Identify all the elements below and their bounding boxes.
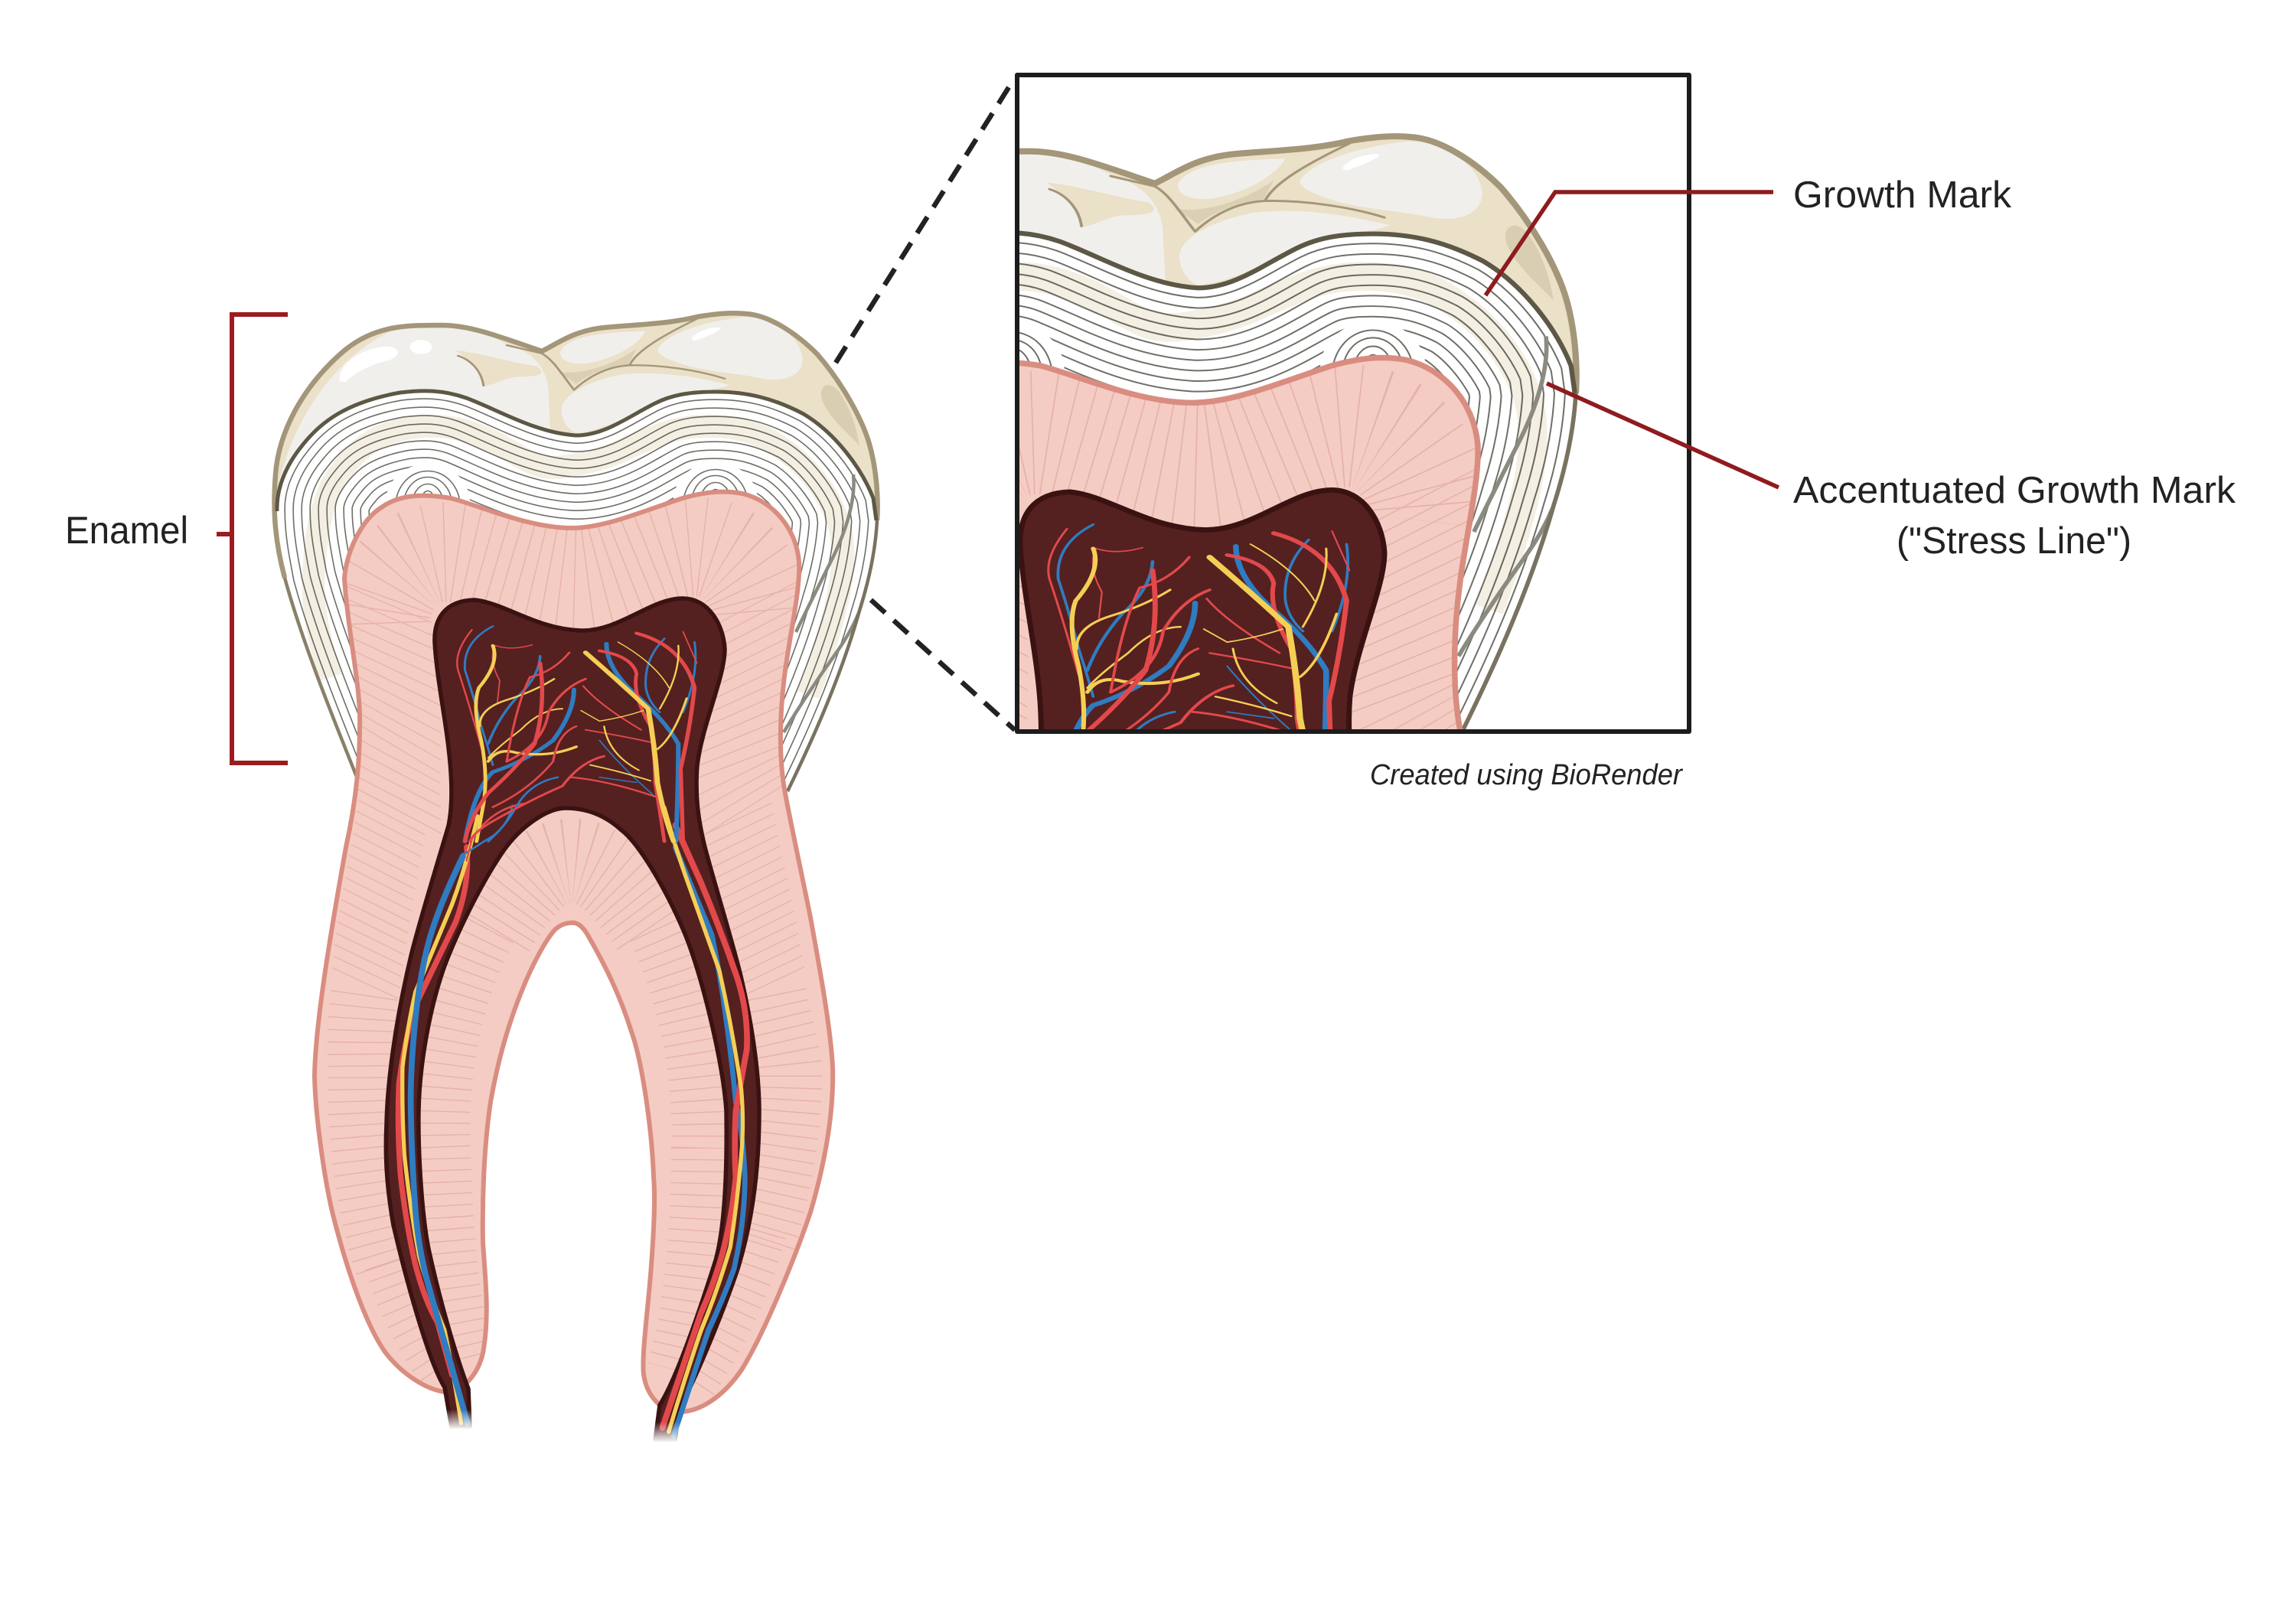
label: Stress Line: ("Stress Line"): [1896, 520, 2131, 562]
credit: Created using BioRender: [1370, 759, 1683, 791]
label: Accentuated Growth Mark: Accentuated Growth Mark: [1793, 470, 2236, 511]
inset: enlarged crown: [1019, 133, 1580, 729]
leader: growth mark: [1486, 192, 1773, 295]
label: Enamel: Enamel: [65, 509, 188, 552]
inset frame: [1017, 75, 1689, 732]
leader: accentuated growth mark: [1547, 383, 1779, 487]
dashed zoom connectors: [836, 85, 1015, 730]
label: Growth Mark: Growth Mark: [1793, 174, 2012, 216]
enamel bracket: [217, 315, 288, 763]
main molar illustration: [274, 313, 878, 1442]
